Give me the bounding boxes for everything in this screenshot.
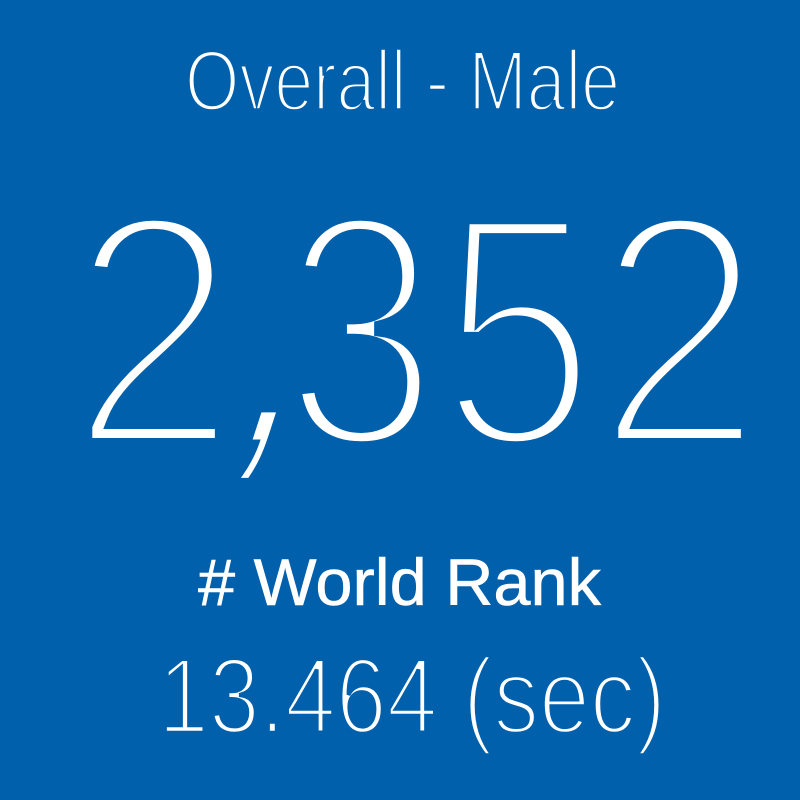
main number: , [212,171,373,506]
label: world rank: # World Rank [198,545,602,619]
main number: 5 [440,145,596,517]
main number [70,144,763,518]
title: Overall - Male [185,34,620,129]
main number: 2 [70,144,237,517]
time value: 13.464 (sec) [158,635,666,756]
main number: 2 [596,144,763,517]
main number: 3 [284,145,438,518]
